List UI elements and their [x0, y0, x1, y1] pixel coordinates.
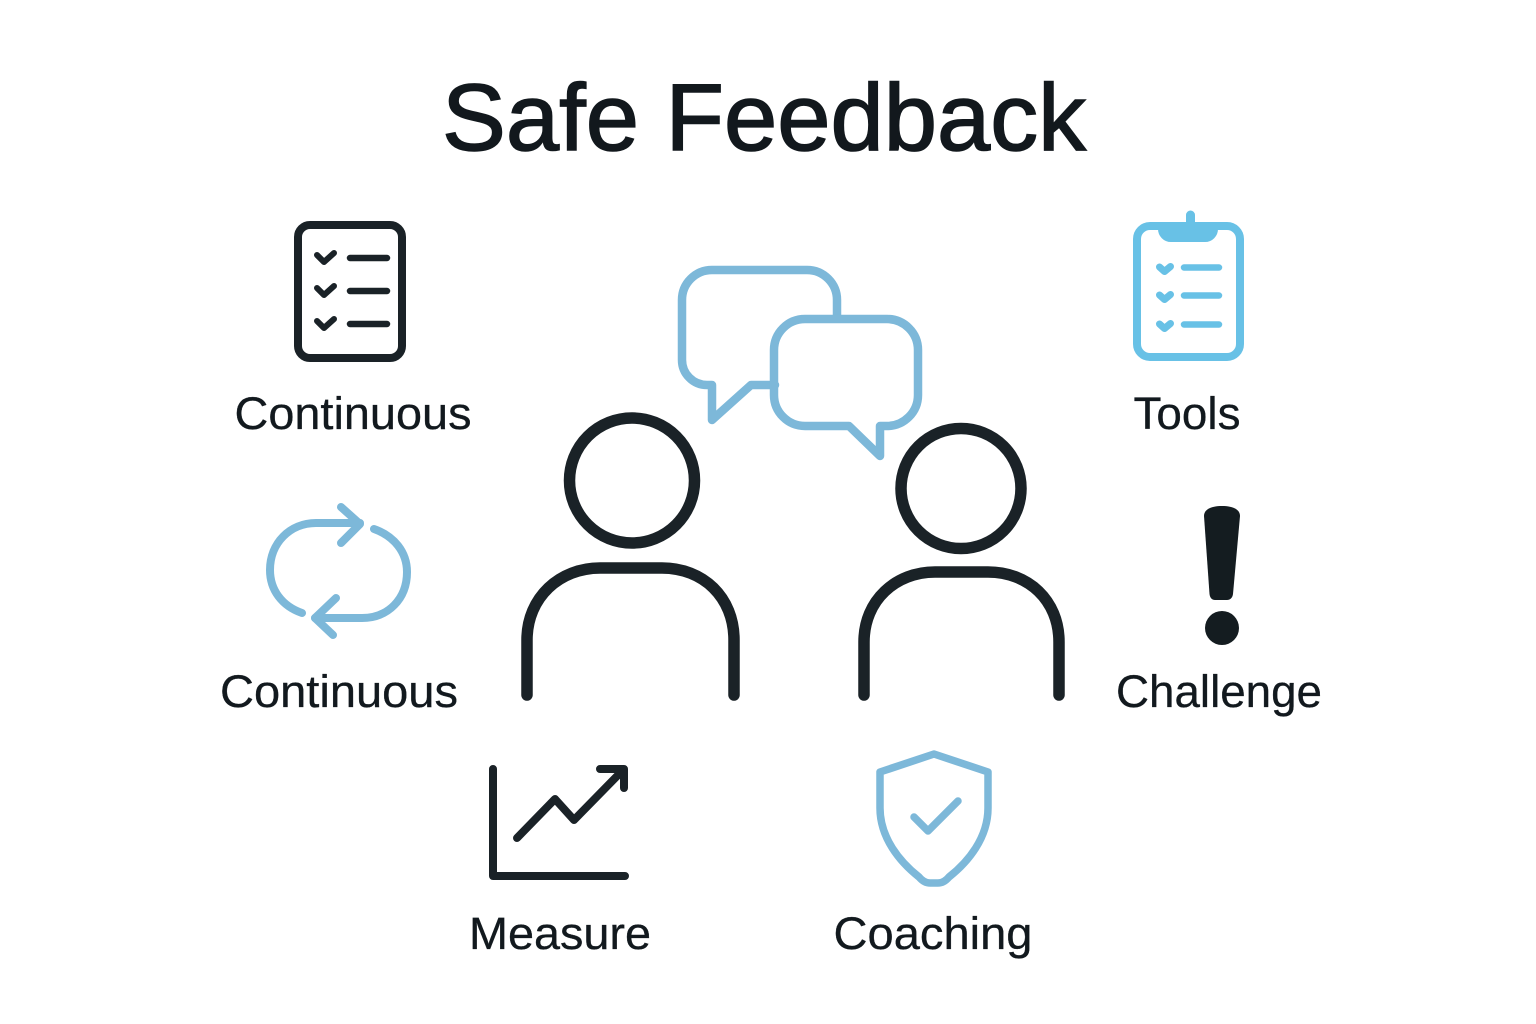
label: Measure: Measure: [469, 908, 651, 959]
icon: person left: [527, 418, 734, 695]
icon: speech bubbles: [682, 270, 918, 456]
icon: growth chart: [493, 769, 625, 876]
icon: shield with check: [880, 754, 988, 883]
icon: person right: [864, 428, 1059, 695]
label: Tools: Tools: [1134, 388, 1240, 439]
icon: exclamation mark: [1204, 506, 1240, 645]
label: Continuous left: Continuous: [220, 666, 458, 717]
icon: cycle arrows: [270, 507, 407, 635]
label: Coaching: Coaching: [834, 908, 1032, 959]
title: Safe Feedback: [442, 65, 1086, 171]
icon: clipboard: [1137, 215, 1240, 357]
label: Continuous top: Continuous: [234, 388, 472, 439]
label: Challenge: Challenge: [1116, 666, 1322, 717]
icon: checklist: [298, 225, 402, 358]
